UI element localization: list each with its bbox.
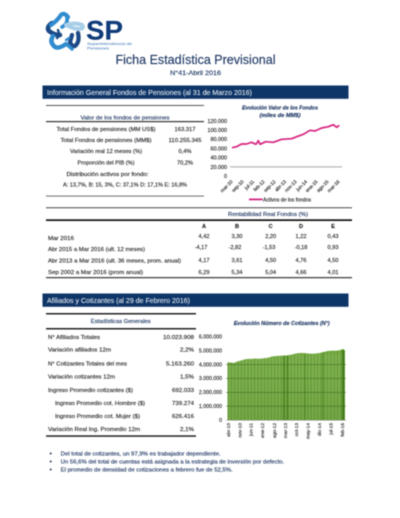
values: 0,43 bbox=[328, 234, 338, 240]
x axis labels: jul-11 bbox=[243, 179, 256, 192]
x axis labels: ago-12 bbox=[272, 423, 278, 438]
row labels: Abr 2015 a Mar 2016 (ult. 12 meses) bbox=[48, 247, 145, 253]
x axis labels: abr-10 bbox=[226, 423, 232, 437]
y axis labels: 120.000 bbox=[208, 119, 227, 125]
values: 4,50 bbox=[265, 258, 276, 264]
values: -0,18 bbox=[295, 245, 307, 251]
x axis labels: ene-15 bbox=[305, 179, 320, 194]
y axis labels: 0 bbox=[224, 174, 227, 180]
values: 4,66 bbox=[296, 270, 306, 276]
y axis labels bbox=[199, 334, 222, 424]
row labels: Sep 2002 a Mar 2016 (prom anual) bbox=[48, 270, 143, 276]
rows: 739.274 bbox=[172, 401, 195, 407]
x axis labels bbox=[219, 179, 342, 194]
rows: 10.023.908 bbox=[163, 335, 194, 341]
rows: Proporción del PIB (%) bbox=[78, 160, 135, 166]
y axis labels: 20.000 bbox=[210, 165, 227, 171]
bars bbox=[228, 349, 345, 420]
column headers: A bbox=[202, 224, 206, 230]
x axis labels: nov-10 bbox=[238, 423, 244, 438]
y axis labels bbox=[208, 119, 227, 180]
title: Ficha Estadística Previsional bbox=[116, 52, 276, 67]
chart title: Evolución Número de Cotizantes (N°) bbox=[234, 321, 330, 327]
column headers: B bbox=[235, 224, 239, 230]
values: -1,53 bbox=[263, 245, 275, 251]
x axis labels: abr-13 bbox=[274, 179, 288, 193]
rows: Distribución activos por fondo: bbox=[66, 172, 149, 178]
bullet notes: El promedio de densidad de cotizaciones a febrero fue de 52,5%. bbox=[61, 468, 233, 474]
gridlines bbox=[226, 364, 346, 407]
x axis labels: jun-11 bbox=[248, 423, 254, 437]
chart: evolución valor de los fondos bbox=[208, 106, 342, 204]
legend bbox=[249, 198, 262, 200]
rows bbox=[56, 127, 202, 188]
y axis labels: 60.000 bbox=[210, 146, 227, 152]
rows: Ingreso Promedio cot. Hombre ($) bbox=[55, 401, 145, 407]
x axis labels: sep-10 bbox=[231, 179, 246, 194]
rows: Ingreso Promedio cotizantes ($) bbox=[48, 388, 133, 394]
x axis labels: jun-14 bbox=[295, 179, 309, 194]
panel: rentabilidad real fondos bbox=[46, 207, 352, 278]
values: -4,17 bbox=[195, 245, 207, 251]
rows: Total Fondos de pensiones (MM$) bbox=[60, 138, 152, 144]
logo subtitle: Superintendencia de bbox=[87, 41, 133, 46]
values bbox=[195, 234, 338, 276]
chart title: Evolución Valor de los Fondos bbox=[242, 106, 318, 112]
row labels bbox=[48, 236, 181, 276]
x axis labels: mar-16 bbox=[326, 179, 342, 194]
section banner: Afiliados y Cotizantes: Afiliados y Cotizantes (al 29 de Febrero 2016) bbox=[47, 296, 190, 305]
values: 1,22 bbox=[296, 234, 306, 240]
rows: Variación real 12 meses (%) bbox=[70, 149, 142, 155]
values: 0,93 bbox=[328, 245, 338, 251]
y axis labels: 4.000.000 bbox=[199, 362, 222, 368]
rows: Variación Real Ing. Promedio 12m bbox=[48, 427, 140, 433]
values: 4,17 bbox=[199, 258, 209, 264]
rows: 163.317 bbox=[174, 127, 196, 133]
section banner: Información General bbox=[42, 86, 348, 99]
logo: Superintendencia de Pensiones: Pensiones bbox=[87, 46, 109, 50]
rows: 0,4% bbox=[178, 149, 192, 155]
x axis labels bbox=[226, 423, 346, 439]
chart: evolución valor de los fondos: (miles de MM$) bbox=[260, 113, 301, 119]
rows: 2,2% bbox=[180, 348, 194, 354]
bullet notes bbox=[50, 452, 285, 474]
y axis labels: 40.000 bbox=[210, 156, 227, 162]
x axis labels: feb-12 bbox=[253, 179, 267, 193]
values: 4,01 bbox=[328, 270, 338, 276]
y axis labels: 1.000.000 bbox=[199, 404, 222, 410]
rows: N° Cotizantes Totales del mes bbox=[48, 362, 127, 368]
rows: 1,5% bbox=[180, 374, 194, 380]
row labels: Mar 2016 bbox=[48, 236, 74, 242]
rows: Total Fondos de pensiones (MM US$) bbox=[56, 127, 156, 133]
x axis labels: oct-13 bbox=[294, 423, 300, 436]
values: 4,42 bbox=[199, 234, 209, 240]
rows: Ingreso Promedio cot. Mujer ($) bbox=[55, 414, 140, 420]
x axis labels: dic-14 bbox=[317, 423, 323, 436]
y axis labels: 2.000.000 bbox=[199, 390, 222, 396]
rows bbox=[48, 335, 195, 433]
rows: A: 13,7%, B: 15, 3%, C: 37,1% D: 17,1% E: 16,8% bbox=[63, 182, 187, 188]
y axis labels: 80.000 bbox=[210, 137, 227, 143]
y axis labels: 6.000.000 bbox=[199, 334, 222, 340]
values: 5,34 bbox=[232, 270, 242, 276]
table heading: Rentabilidad Real Fondos (%) bbox=[228, 212, 308, 218]
rows: 70,2% bbox=[177, 160, 193, 166]
values: -2,82 bbox=[229, 245, 241, 251]
bullet notes: Un 56,6% del total de cuentas está asignada a la estrategia de inversión por defecto. bbox=[61, 460, 285, 466]
row labels: Abr 2013 a Mar 2016 (ult. 36 meses, prom. anual) bbox=[48, 258, 181, 264]
y axis labels: 5.000.000 bbox=[199, 348, 222, 354]
y axis labels: 100.000 bbox=[208, 128, 227, 134]
rows: 626.416 bbox=[172, 414, 194, 420]
panel: valor de los fondos bbox=[46, 105, 204, 197]
logo letters SP: SP bbox=[86, 16, 123, 46]
rows: 110.255.345 bbox=[168, 138, 202, 144]
values: 4,76 bbox=[296, 258, 306, 264]
y axis labels: 0 bbox=[219, 418, 222, 424]
icon: star of hands bbox=[48, 14, 83, 49]
column headers: E bbox=[331, 224, 335, 230]
values: 6,29 bbox=[199, 270, 209, 276]
rows: Variación afiliados 12m bbox=[48, 348, 111, 354]
column headers: D bbox=[299, 224, 303, 230]
rows: 692.033 bbox=[172, 388, 194, 394]
x axis labels: mar-13 bbox=[283, 423, 289, 438]
x axis labels: ene-12 bbox=[260, 423, 266, 438]
rows: Variación cotizantes 12m bbox=[48, 374, 115, 380]
section banner: Información General: Información General Fondos de Pensiones (al 31 de Marzo 2016) bbox=[47, 88, 252, 97]
x axis labels: may-14 bbox=[306, 423, 312, 439]
rows: 5.163.260 bbox=[166, 362, 194, 368]
values: 4,50 bbox=[328, 258, 338, 264]
heading: Valor de los fondos de pensiones bbox=[80, 116, 170, 122]
logo: Superintendencia de Pensiones bbox=[48, 14, 133, 50]
subtitle: issue number: N°41-Abril 2016 bbox=[170, 69, 221, 77]
x axis labels: feb-16 bbox=[340, 423, 346, 437]
values: 2,20 bbox=[265, 234, 276, 240]
values: 3,30 bbox=[232, 234, 242, 240]
column headers: C bbox=[269, 224, 273, 230]
bullet notes: Del total de cotizantes, un 97,9% es trabajador dependiente. bbox=[61, 452, 221, 458]
rows: N° Afiliados Totales bbox=[48, 335, 100, 341]
chart: evolución número de cotizantes bbox=[199, 321, 346, 439]
rows: 2,1% bbox=[180, 427, 194, 433]
x axis labels: nov-13 bbox=[284, 179, 299, 194]
x axis labels: jul-15 bbox=[328, 423, 334, 436]
section banner: Afiliados y Cotizantes bbox=[42, 294, 348, 307]
column headers bbox=[202, 224, 335, 230]
x axis labels: sep-12 bbox=[263, 179, 278, 194]
values: 5,04 bbox=[265, 270, 276, 276]
y axis labels: 3.000.000 bbox=[199, 376, 222, 382]
values: 3,61 bbox=[232, 258, 242, 264]
x axis labels: ago-15 bbox=[316, 179, 331, 194]
panel: estadísticas generales bbox=[46, 313, 196, 437]
line: activos de los fondos bbox=[232, 125, 339, 148]
heading: Estadísticas Generales bbox=[91, 319, 151, 325]
x axis labels: mar-10 bbox=[219, 179, 235, 194]
chart: evolución valor de los fondos: Activos de los fondos bbox=[263, 198, 312, 204]
